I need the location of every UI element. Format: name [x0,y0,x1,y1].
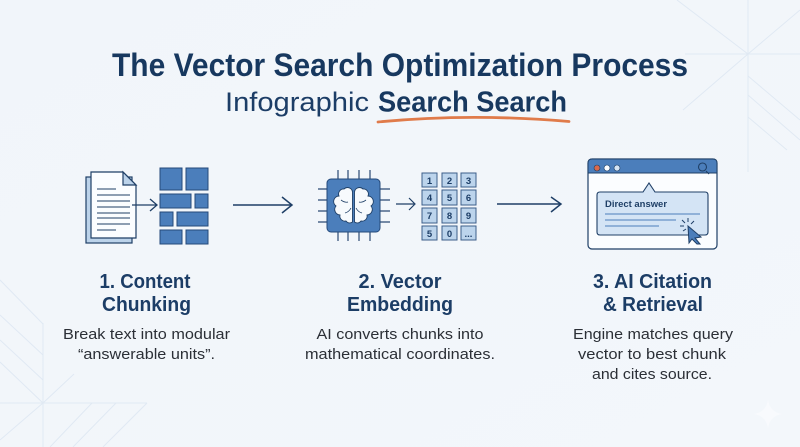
icon: browser with direct answer: Direct answer [605,199,667,210]
icon: number grid: 2 [447,176,452,187]
step 3 heading line 2: & Retrieval [603,294,703,316]
decorative lines: bottom left [0,280,147,447]
step 3 description: and cites source. [592,366,712,383]
icon: number grid [422,173,476,240]
step 3 description: vector to best chunk [578,346,727,363]
answer bubble [597,183,708,235]
cursor [688,226,701,244]
icon: number grid: 3 [466,176,471,187]
icon: content blocks [160,168,208,244]
icon: number grid: 8 [447,211,452,222]
icon: number grid: 5 [447,193,453,204]
step 1 description: “answerable units”. [78,346,215,363]
icon: number grid: 4 [427,193,433,204]
subtitle: bold part: Search Search [378,86,567,118]
icon: document stack [86,172,136,243]
decorative sparkle [754,400,782,428]
step 3 description: Engine matches query [573,326,734,343]
step 1 heading line 2: Chunking [102,294,191,316]
icon: number grid: 9 [466,211,471,222]
step 2 description: mathematical coordinates. [305,346,495,363]
step 3 description [573,326,734,383]
search icon [698,163,709,174]
subtitle: regular part: Infographic [225,87,369,117]
brain [334,188,373,223]
icon: number grid: ... [465,229,472,240]
decorative lines: top right [677,0,800,172]
step 1 heading: 1. Content [100,271,191,293]
step 2 heading: 2. Vector [358,271,442,293]
arrow: step 1 to step 2 [233,197,292,213]
step 1 description: Break text into modular [63,326,230,343]
arrow: document to chunks [132,199,157,211]
step 1 description [63,326,230,363]
icon: number grid: 7 [427,211,432,222]
subtitle underline [378,117,569,122]
step 2 heading line 2: Embedding [347,294,453,316]
icon: number grid: 6 [466,193,471,204]
step 3 heading: 3. AI Citation [593,271,712,293]
step 2 description [305,326,495,363]
icon: number grid: 0 [447,229,452,240]
icon: number grid: 1 [427,176,433,187]
step 2 description: AI converts chunks into [316,326,484,343]
arrow: step 2 to step 3 [497,197,561,212]
title: The Vector Search Optimization Process [112,47,688,83]
arrow: chip to vector grid [396,198,415,210]
icon: browser with direct answer [588,159,717,249]
icon: number grid: 5 [427,229,433,240]
icon: AI chip with brain [318,170,390,241]
